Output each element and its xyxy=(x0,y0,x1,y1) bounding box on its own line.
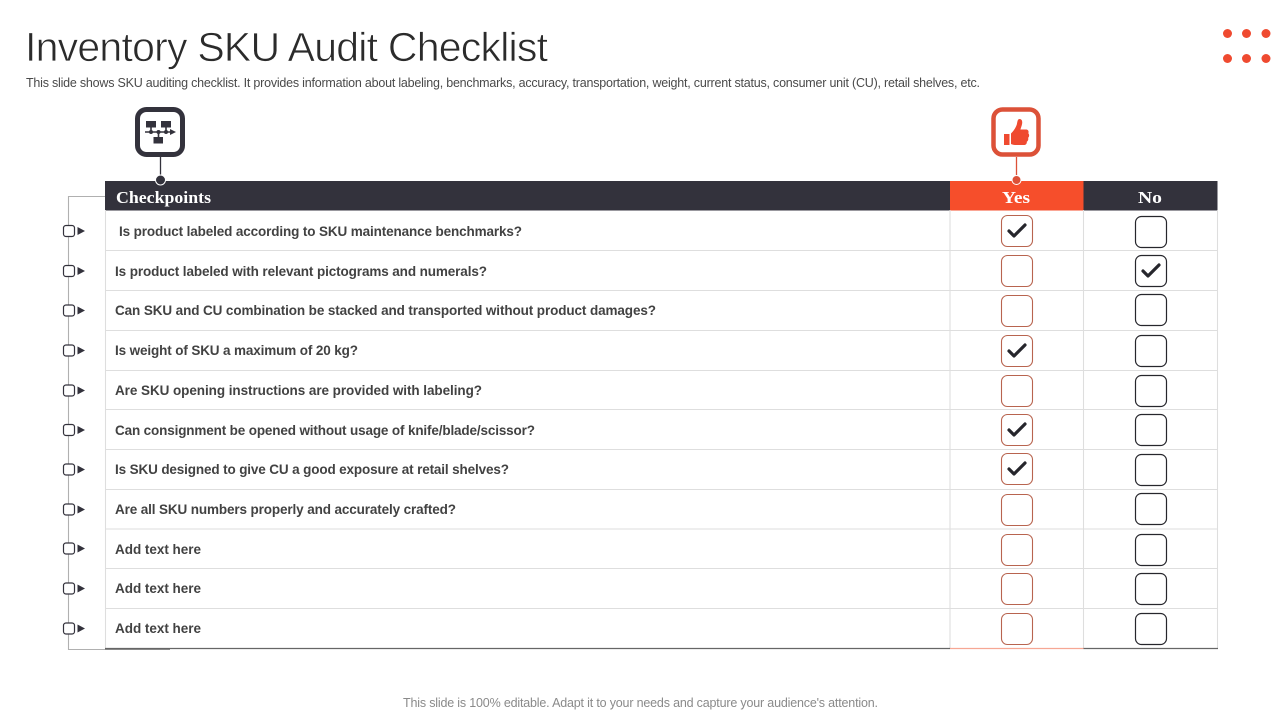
table grid xyxy=(105,210,1218,649)
table bottom rule xyxy=(105,648,1218,650)
header: no: No xyxy=(1138,188,1162,207)
checkpoint questions: Is SKU designed to give CU a good exposure at retail shelves? xyxy=(115,462,509,477)
connector dot: checkpoints xyxy=(156,175,166,185)
subtitle: This slide shows SKU auditing checklist. It provides information about labeling, benchmarks, accuracy, transportation, weight, current status, consumer unit (CU), retail shelves, etc. xyxy=(26,76,980,90)
checkpoint questions: Add text here xyxy=(115,581,201,596)
icon: network hierarchy xyxy=(138,110,182,176)
icon: decorative dot grid xyxy=(1223,29,1270,63)
checkpoint questions: Can consignment be opened without usage of knife/blade/scissor? xyxy=(115,423,535,438)
checkpoint questions: Is product labeled with relevant pictograms and numerals? xyxy=(115,264,487,279)
icon: thumbs up xyxy=(994,110,1038,176)
footer note: This slide is 100% editable. Adapt it to your needs and capture your audience's attention. xyxy=(403,696,878,710)
checkpoint questions: Add text here xyxy=(115,621,201,636)
checkpoint questions: Are SKU opening instructions are provided with labeling? xyxy=(115,383,482,398)
no checkboxes xyxy=(1136,216,1166,644)
table header xyxy=(105,181,1218,210)
title: Inventory SKU Audit Checklist xyxy=(25,24,549,70)
checkpoint questions: Can SKU and CU combination be stacked and transported without product damages? xyxy=(115,303,656,318)
header: checkpoints: Checkpoints xyxy=(116,188,211,207)
checkpoint questions xyxy=(115,224,656,636)
checkpoint questions: Are all SKU numbers properly and accurately crafted? xyxy=(115,502,456,517)
header: yes: Yes xyxy=(1002,188,1030,207)
yes checkboxes xyxy=(1002,216,1032,644)
checkpoint questions: Add text here xyxy=(115,542,201,557)
row markers xyxy=(64,226,85,634)
check marks xyxy=(1009,225,1159,474)
checkpoint questions: Is weight of SKU a maximum of 20 kg? xyxy=(115,343,358,358)
checkpoint questions: Is product labeled according to SKU maintenance benchmarks? xyxy=(119,224,522,239)
connector dot: yes xyxy=(1012,176,1021,184)
left bracket xyxy=(68,196,105,650)
